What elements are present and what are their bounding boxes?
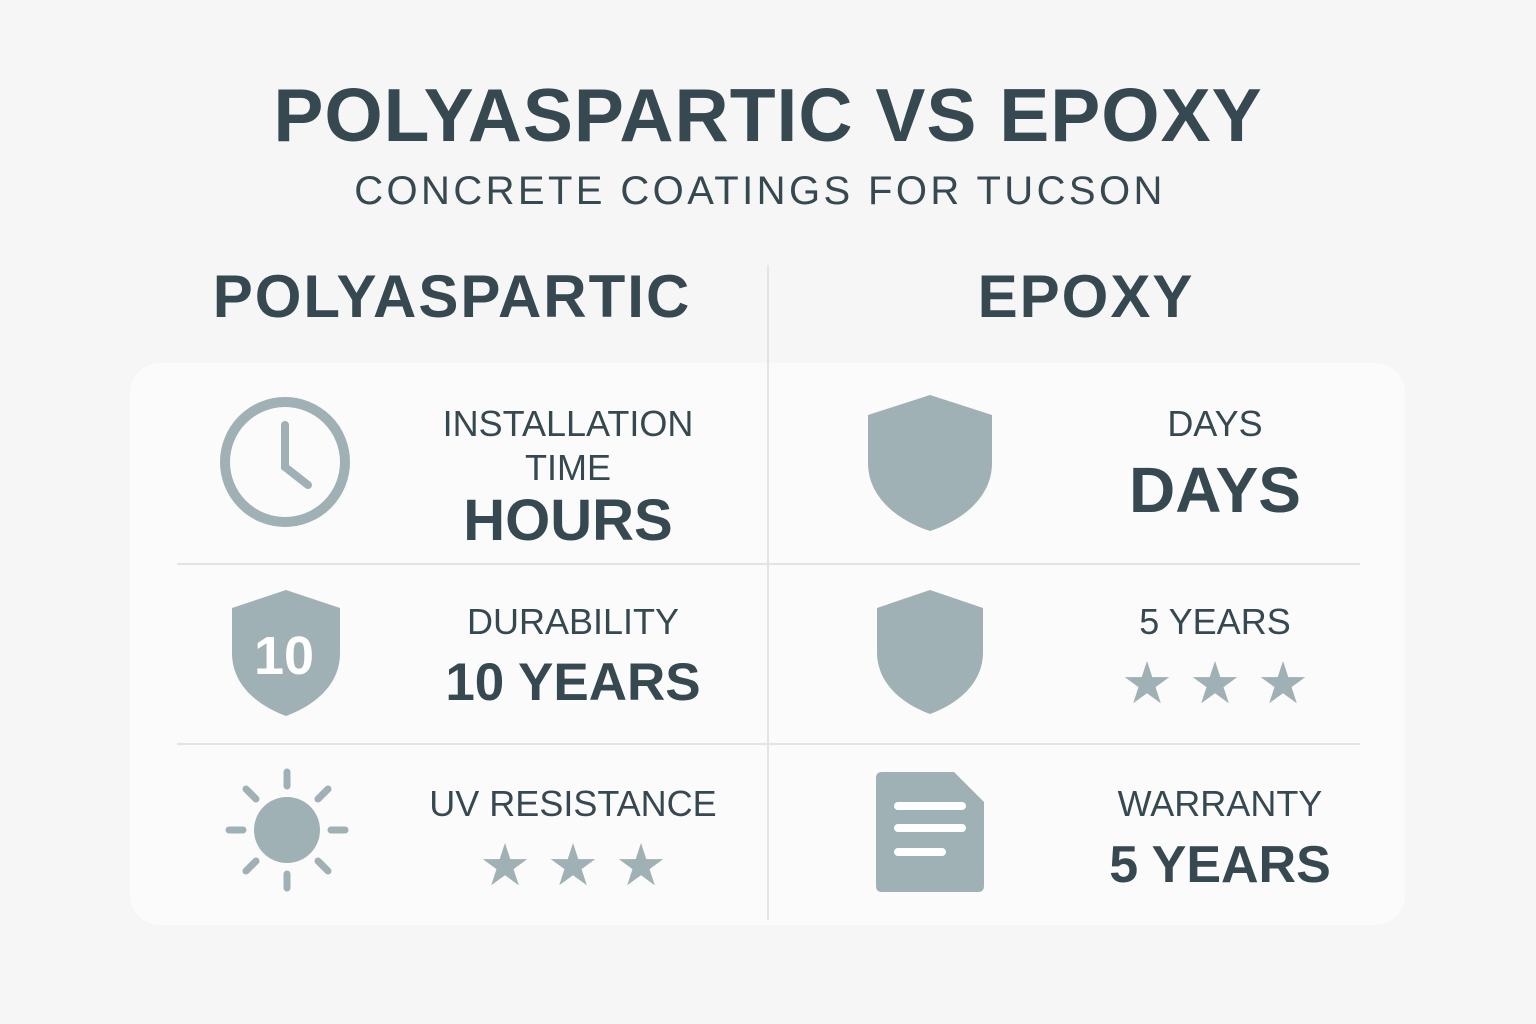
icon: clock xyxy=(220,397,350,527)
text: uv resistance: UV RESISTANCE xyxy=(429,783,717,824)
icon: shield epoxy 2 xyxy=(877,590,983,714)
text: installation time hours: HOURS xyxy=(463,488,673,553)
text: warranty: WARRANTY xyxy=(1118,783,1322,824)
icon: shield 10 xyxy=(232,590,340,716)
text: uv resistance: ★★★ xyxy=(479,833,683,898)
text: days: DAYS xyxy=(1129,454,1301,526)
text: installation time hours xyxy=(443,403,693,553)
text: durability: DURABILITY xyxy=(467,601,679,642)
text: days xyxy=(1129,403,1301,526)
icon: document xyxy=(876,772,984,892)
text: 5 years stars: ★★★ xyxy=(1121,651,1325,716)
text: warranty: 5 YEARS xyxy=(1109,836,1331,894)
icon: shield 10: 10 xyxy=(254,626,314,686)
text: warranty xyxy=(1109,783,1331,894)
text: durability xyxy=(445,601,701,712)
panel: comparison xyxy=(130,363,1405,925)
text: 5 years stars xyxy=(1121,601,1325,716)
heading: epoxy: EPOXY xyxy=(978,263,1194,330)
text: days: DAYS xyxy=(1167,403,1263,444)
text: installation time hours: INSTALLATION xyxy=(443,403,693,444)
text: uv resistance xyxy=(429,783,717,898)
text: installation time hours: TIME xyxy=(525,447,611,488)
icon: shield epoxy 1 xyxy=(868,395,992,531)
subtitle: CONCRETE COATINGS FOR TUCSON xyxy=(354,169,1166,213)
icon: sun xyxy=(226,768,348,892)
title: POLYASPARTIC VS EPOXY xyxy=(273,73,1263,157)
text: durability: 10 YEARS xyxy=(445,653,701,712)
text: 5 years stars: 5 YEARS xyxy=(1139,601,1291,642)
heading: polyaspartic: POLYASPARTIC xyxy=(213,263,691,330)
